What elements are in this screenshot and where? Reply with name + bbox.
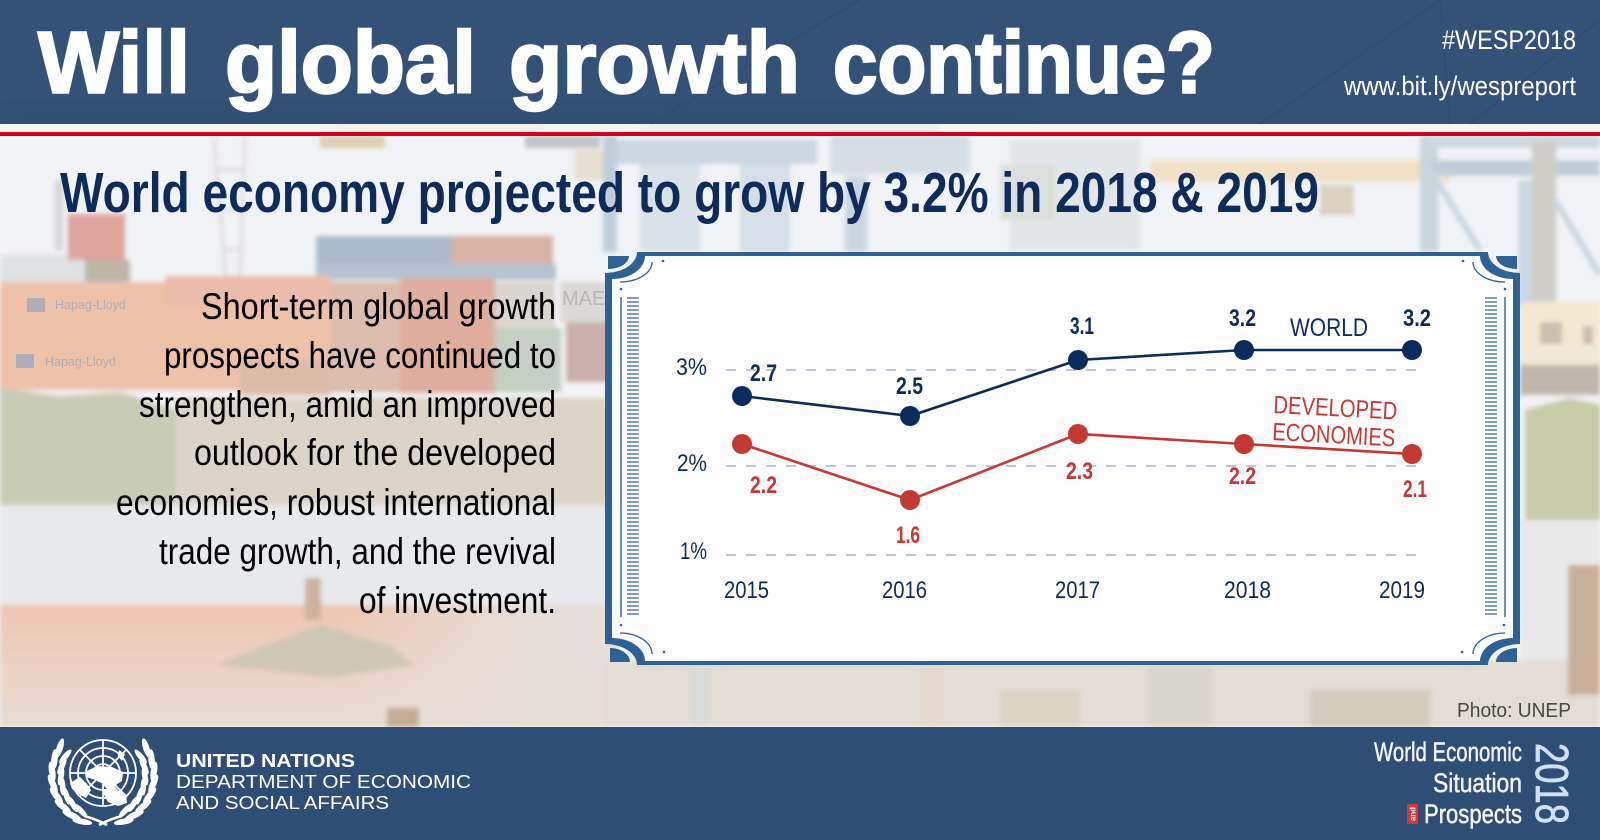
x axis labels: 2018 bbox=[1224, 577, 1271, 604]
yellow boom bbox=[1150, 160, 1450, 182]
report logo: Prospects bbox=[1424, 799, 1522, 829]
series: world: 3.2 bbox=[1403, 305, 1431, 332]
series: developed economies: ECONOMIES bbox=[1272, 418, 1396, 452]
x axis labels: 2015 bbox=[724, 577, 769, 604]
wreath bbox=[46, 737, 160, 826]
series: world: 3.2 bbox=[1229, 305, 1256, 332]
department name: DEPARTMENT OF ECONOMIC bbox=[176, 771, 471, 792]
x axis labels: 2017 bbox=[1055, 577, 1100, 604]
gridlines bbox=[726, 370, 1416, 555]
debris and posts bbox=[215, 625, 415, 678]
body text block: of investment. bbox=[359, 580, 556, 621]
report logo: Situation bbox=[1433, 768, 1522, 798]
background photo: port and containers: MAE bbox=[562, 288, 605, 310]
body text block bbox=[116, 286, 556, 621]
body text block: trade growth, and the revival bbox=[159, 531, 556, 572]
report logo bbox=[1374, 737, 1578, 829]
panel: chart frame bbox=[605, 252, 1520, 665]
series: world: 2.5 bbox=[896, 373, 923, 400]
y axis labels: 2% bbox=[677, 450, 707, 477]
header band bbox=[0, 0, 1600, 125]
report logo: and bbox=[1408, 807, 1418, 821]
series: developed economies bbox=[732, 391, 1427, 549]
series: developed economies: 2.1 bbox=[1403, 476, 1427, 503]
series: world: WORLD bbox=[1290, 314, 1368, 342]
department name: UNITED NATIONS bbox=[176, 750, 355, 771]
title: Will bbox=[38, 14, 190, 112]
vegetation bbox=[0, 388, 180, 505]
series: world: 3.1 bbox=[1070, 313, 1094, 340]
right building bbox=[1520, 302, 1600, 344]
body text block: economies, robust international bbox=[116, 482, 556, 523]
water bbox=[0, 505, 620, 607]
title: growth bbox=[509, 14, 800, 112]
body text block: outlook for the developed bbox=[194, 432, 556, 473]
lattice tower bbox=[214, 136, 245, 280]
department name bbox=[176, 750, 471, 813]
background photo: port and containers: Hapag-Lloyd bbox=[45, 355, 116, 369]
icon: UN emblem bbox=[46, 737, 160, 826]
crane tops bbox=[320, 136, 385, 148]
containers bbox=[316, 236, 451, 264]
series: world: 2.7 bbox=[750, 360, 777, 387]
series: developed economies: 2.2 bbox=[750, 472, 777, 499]
blue crane bbox=[603, 136, 617, 252]
series: developed economies: 2.3 bbox=[1066, 458, 1093, 485]
red rule bbox=[0, 132, 1600, 136]
hashtag: #WESP2018 bbox=[1442, 25, 1576, 55]
title bbox=[38, 14, 1215, 112]
series: developed economies: DEVELOPED bbox=[1273, 391, 1398, 425]
orange reflection bbox=[0, 605, 620, 727]
right crane bbox=[1420, 136, 1438, 252]
subtitle: World economy projected to grow by 3.2% in 2018 & 2019 bbox=[60, 161, 1319, 225]
footer band bbox=[0, 727, 1600, 840]
x axis labels bbox=[724, 577, 1425, 604]
department name: AND SOCIAL AFFAIRS bbox=[176, 792, 389, 813]
series: world bbox=[732, 305, 1431, 426]
ship bbox=[0, 255, 85, 282]
series: developed economies: 2.2 bbox=[1229, 463, 1256, 490]
title: continue? bbox=[833, 14, 1215, 112]
white strip behind the rule bbox=[0, 124, 1600, 132]
line chart bbox=[676, 305, 1431, 604]
body text block: Short-term global growth bbox=[201, 286, 556, 327]
report link: www.bit.ly/wespreport bbox=[1343, 71, 1576, 101]
y axis labels bbox=[676, 354, 707, 565]
y axis labels: 3% bbox=[676, 354, 707, 381]
background photo: port and containers: Hapag-Lloyd bbox=[55, 298, 126, 312]
report logo: World Economic bbox=[1374, 737, 1522, 767]
x axis labels: 2016 bbox=[882, 577, 927, 604]
body text block: prospects have continued to bbox=[164, 335, 556, 376]
x axis labels: 2019 bbox=[1379, 577, 1425, 604]
photo credit: Photo: UNEP bbox=[1457, 700, 1571, 722]
y axis labels: 1% bbox=[680, 538, 707, 565]
body text block: strengthen, amid an improved bbox=[139, 384, 556, 425]
series: developed economies: 1.6 bbox=[896, 522, 920, 549]
title: global bbox=[225, 14, 476, 112]
